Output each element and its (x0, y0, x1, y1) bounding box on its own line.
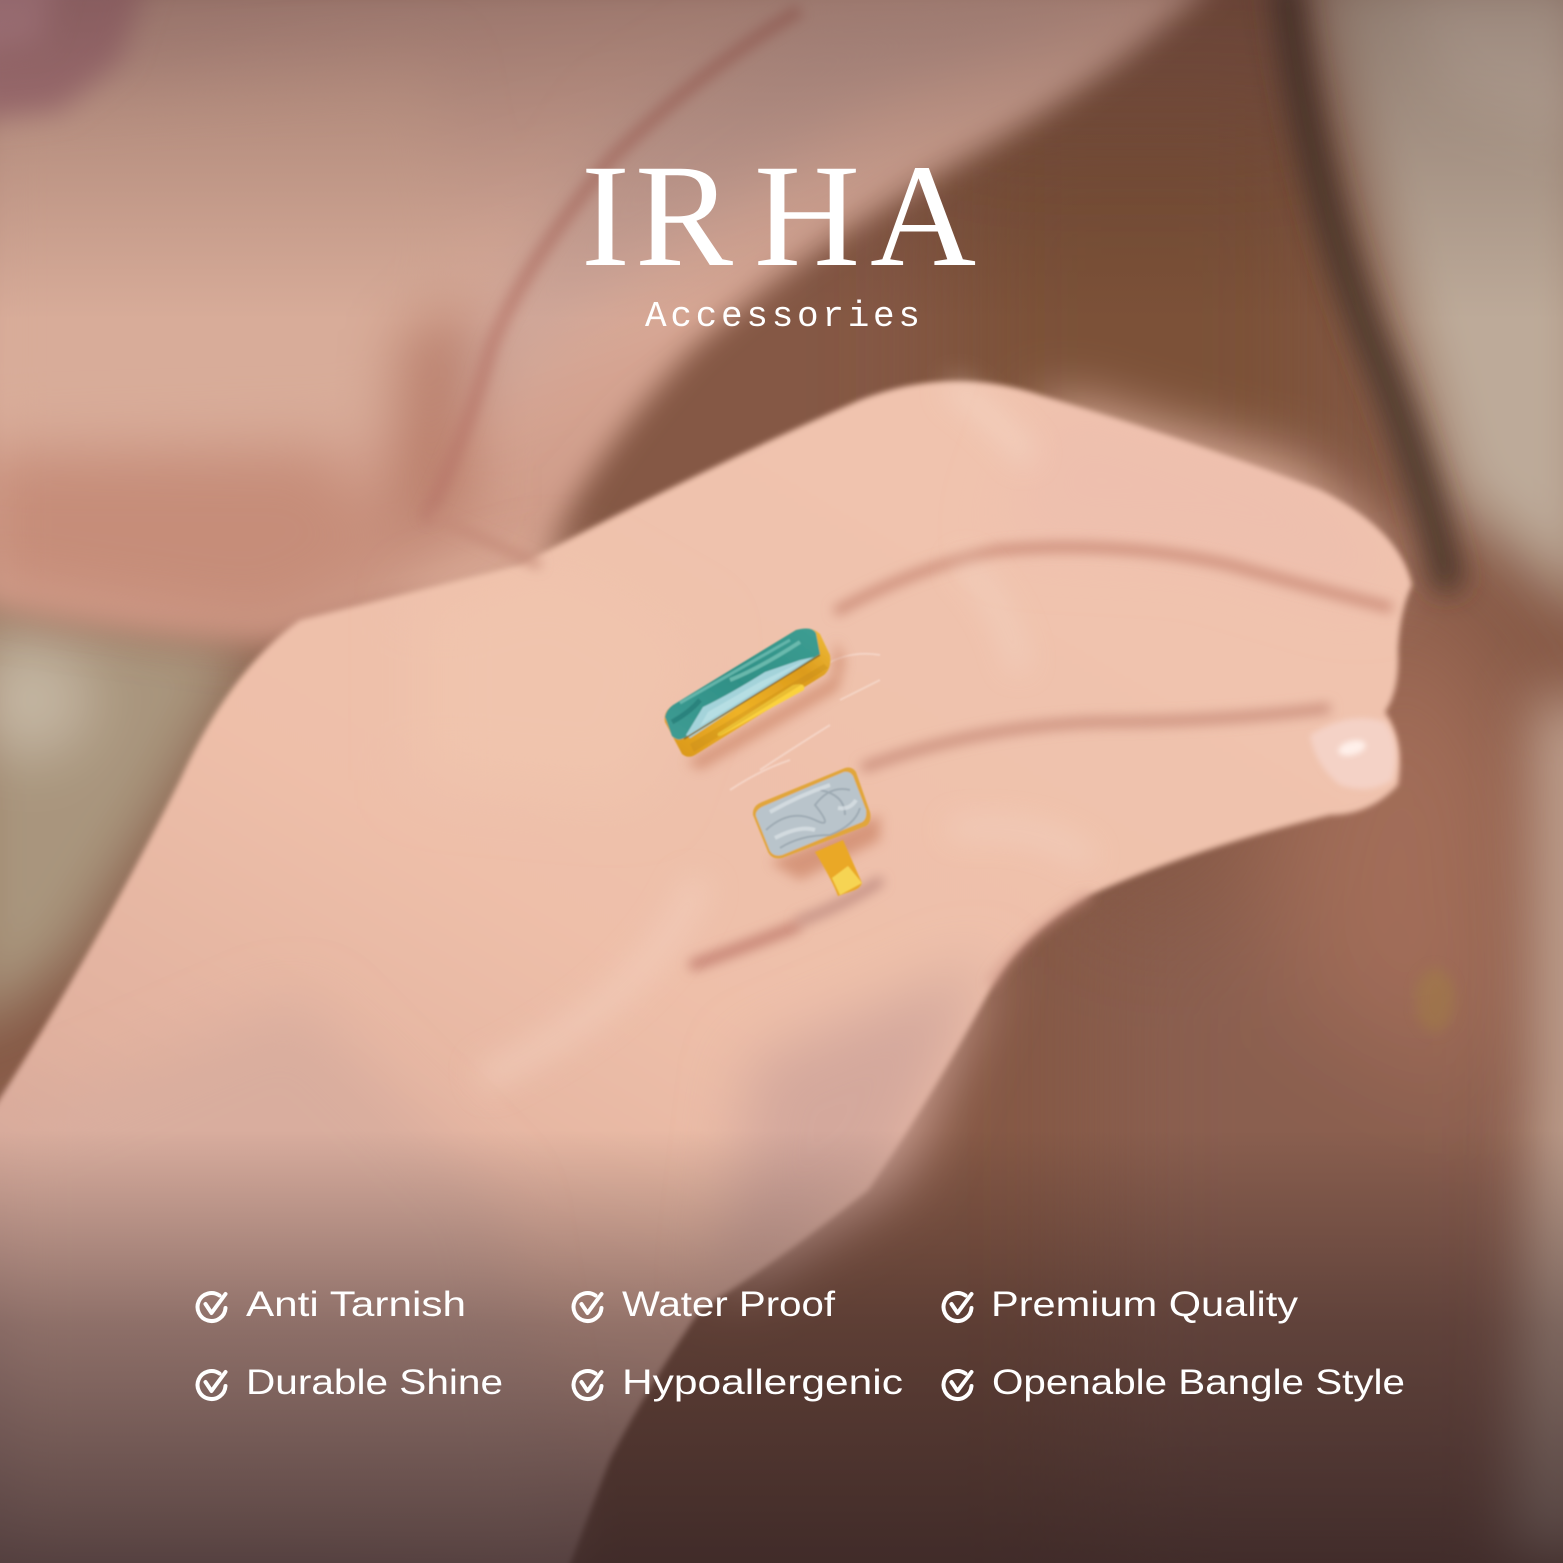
ring: green enamel bar (665, 629, 830, 757)
feature: Water Proof: Water Proof (622, 1285, 835, 1324)
top darkening overlay (0, 0, 1563, 320)
pink fabric top left (0, 0, 150, 120)
feature: Openable Bangle Style: Openable Bangle Style (992, 1363, 1405, 1402)
gold bezel (753, 768, 870, 858)
feature list (198, 1285, 1405, 1402)
gold band under stone (815, 840, 862, 896)
feature: Anti Tarnish: Anti Tarnish (246, 1285, 466, 1324)
title: IRHA: IRHA (581, 134, 976, 297)
upper hand and finger (0, 0, 1215, 640)
fingernail (1310, 718, 1396, 789)
feature: Anti Tarnish (198, 1285, 466, 1324)
finger shading and creases (0, 385, 1392, 1563)
bottom darkening overlay (0, 1130, 1563, 1563)
skin texture near ring (730, 654, 880, 790)
stone face (756, 772, 866, 856)
ring: grey marbled stone (753, 768, 870, 896)
backdrop: dark fold at upper right (1285, 0, 1450, 590)
green enamel face (665, 629, 820, 740)
crease between palm and finger (425, 10, 800, 520)
gold base of bar (665, 629, 830, 757)
feature: Hypoallergenic: Hypoallergenic (622, 1363, 903, 1402)
backdrop: beige fabric at upper right (1300, 0, 1563, 1563)
finger gap below ring band (797, 880, 882, 922)
ring: soft shadow (687, 640, 880, 880)
small bokeh highlight (1415, 968, 1455, 1032)
subtitle: Accessories: Accessories (645, 296, 920, 337)
feature: Durable Shine: Durable Shine (246, 1363, 503, 1402)
feature: Premium Quality: Premium Quality (991, 1285, 1299, 1324)
main hand (0, 381, 1412, 1563)
backdrop: beige fabric at left (0, 590, 260, 1040)
